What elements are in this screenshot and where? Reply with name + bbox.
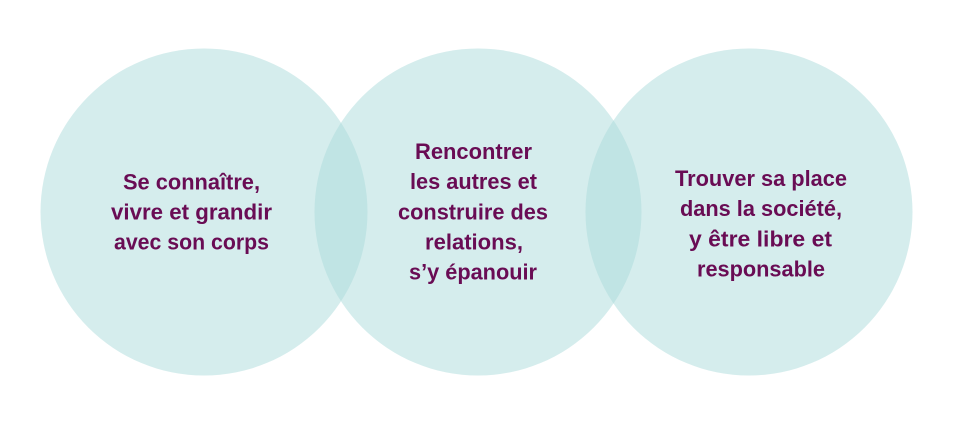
circle: left	[40, 48, 368, 376]
text: left circle: Se connaître,	[123, 170, 260, 194]
text: middle circle: relations,	[425, 230, 523, 254]
text: right circle	[675, 166, 847, 282]
text: left circle: avec son corps	[114, 230, 269, 254]
circle: right	[586, 48, 912, 376]
text: middle circle: les autres et	[410, 169, 538, 194]
text: right circle: responsable	[697, 256, 825, 282]
text: middle circle: construire des	[398, 200, 548, 224]
text: right circle: Trouver sa place	[675, 166, 847, 191]
text: right circle: y être libre et	[689, 226, 833, 252]
text: left circle: vivre et grandir	[111, 200, 272, 224]
text: middle circle: Rencontrer	[415, 139, 532, 164]
text: middle circle	[398, 139, 548, 284]
text: left circle	[111, 170, 272, 254]
circle: middle	[314, 48, 642, 376]
text: right circle: dans la société,	[680, 196, 842, 221]
text: middle circle: s’y épanouir	[409, 260, 537, 284]
